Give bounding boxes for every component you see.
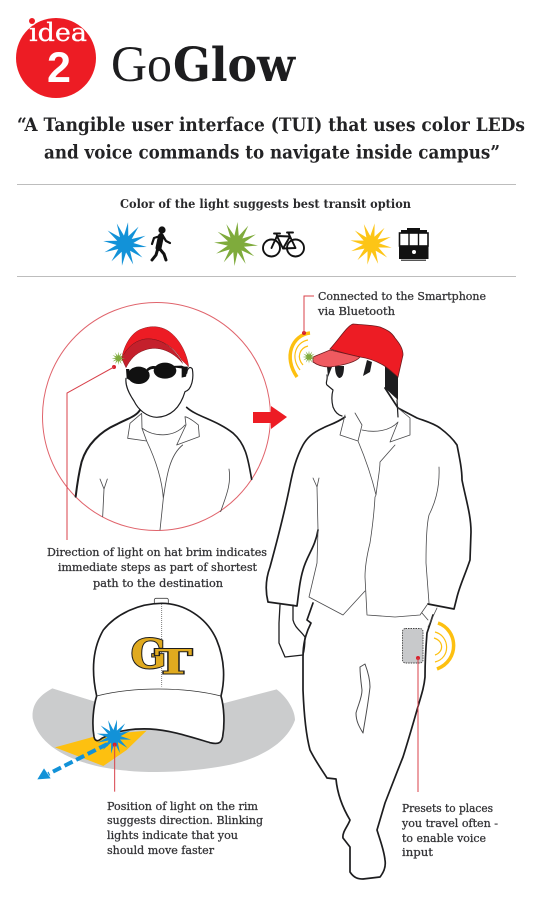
callout text: position of light: should move faster [107, 844, 215, 857]
icon: blue light on rim [94, 717, 134, 757]
legend: bike [213, 221, 304, 267]
legend: trolley [347, 220, 428, 268]
callout text: position of light: suggests direction. Blinking [107, 814, 263, 827]
icon: trolley [399, 228, 428, 261]
title: Go [111, 37, 172, 93]
panel: close-up of wearer [42, 302, 270, 530]
icon: green light on visor [302, 350, 316, 364]
legend: walk [100, 219, 170, 269]
body outline [266, 375, 471, 879]
wearer lines [76, 368, 252, 530]
signal waves from hat [290, 333, 310, 377]
callout text: to enable voice [402, 832, 486, 845]
signal waves from pocket [434, 623, 454, 669]
panel: cap on ground [33, 598, 295, 792]
direction arrow [37, 744, 107, 779]
badge: idea 2: 2 [47, 44, 71, 92]
hair [327, 360, 398, 400]
icon: bicycle [263, 232, 304, 256]
icon: green light on brim [112, 352, 125, 365]
red cap [122, 327, 189, 368]
light beam [55, 731, 147, 766]
icon: pedestrian [152, 226, 170, 260]
badge: idea 2: idea [29, 18, 87, 47]
callout text: position of light: lights indicate that you [107, 829, 238, 842]
callout text: via Bluetooth [317, 305, 395, 318]
arrow [253, 406, 287, 429]
icon: green light [213, 221, 259, 267]
callout text: Presets to places [402, 802, 493, 815]
leader [113, 743, 117, 792]
cap [93, 598, 224, 743]
smartphone in pocket [402, 628, 423, 663]
callout: bluetooth [302, 290, 486, 335]
callout text: you travel often - [401, 817, 498, 830]
GT logo [131, 630, 193, 681]
callout text: direction of light: immediate steps as part of shortest [58, 561, 258, 574]
callout text [317, 290, 486, 318]
callout text: Connected to the Smartphone [318, 290, 486, 303]
callout text: position of light [107, 800, 263, 857]
shadow [33, 688, 295, 772]
callout text: input [402, 846, 434, 859]
title [111, 37, 296, 93]
panel: full figure [266, 324, 471, 879]
callout text: direction of light: Direction of light on hat brim indicates [47, 546, 267, 559]
icon: yellow light [347, 220, 395, 268]
badge: idea 2 [16, 18, 96, 98]
callout: presets [401, 656, 498, 859]
callout text: direction of light: path to the destination [93, 577, 223, 590]
red cap [313, 324, 403, 377]
quote heading [17, 114, 525, 164]
sunglasses [126, 363, 188, 384]
GT logo: G [131, 630, 167, 678]
legend heading: Color of the light suggests best transit option [120, 196, 411, 211]
callout text: direction of light [47, 546, 267, 590]
icon: blue light [100, 219, 150, 269]
GT logo: T [155, 642, 193, 681]
callout text [401, 802, 498, 859]
lens circle [42, 302, 270, 530]
callout: direction of light leader [67, 365, 116, 540]
title: Glow [173, 38, 296, 93]
callout text: position of light: Position of light on the rim [107, 800, 258, 813]
